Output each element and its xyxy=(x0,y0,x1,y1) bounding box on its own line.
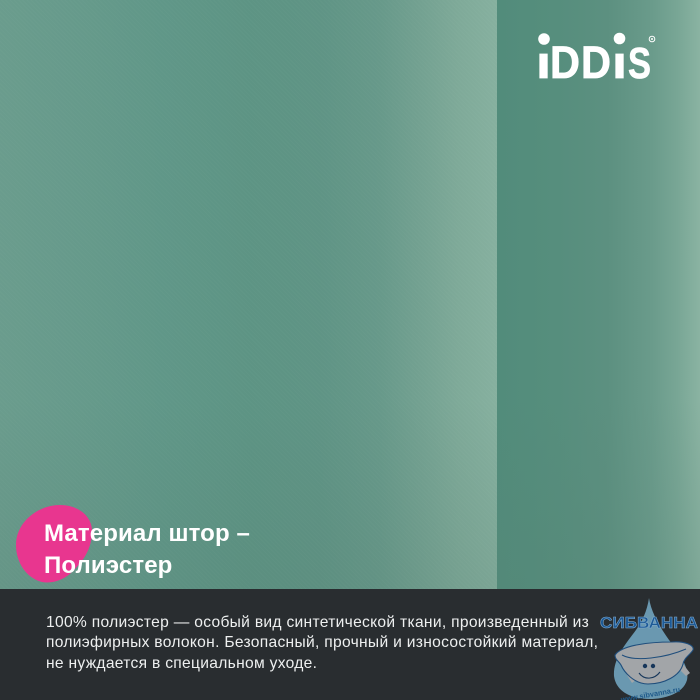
body text: полиэфирных волокон. Безопасный, прочный и износостойкий материал, xyxy=(46,634,598,651)
heading: Полиэстер xyxy=(44,552,172,579)
heading: Материал штор – xyxy=(44,520,250,547)
pink blob accent xyxy=(16,505,92,582)
body text: не нуждается в специальном уходе. xyxy=(46,655,317,672)
watermark: Sibvanna logo xyxy=(600,598,698,700)
logo: IDDIS xyxy=(536,32,656,84)
body text: 100% полиэстер — особый вид синтетической ткани, произведенный из xyxy=(46,614,589,631)
watermark: Sibvanna logo: СИБВАННА xyxy=(600,615,698,632)
footer panel xyxy=(0,589,700,700)
heading xyxy=(44,520,250,579)
body text xyxy=(46,614,598,672)
